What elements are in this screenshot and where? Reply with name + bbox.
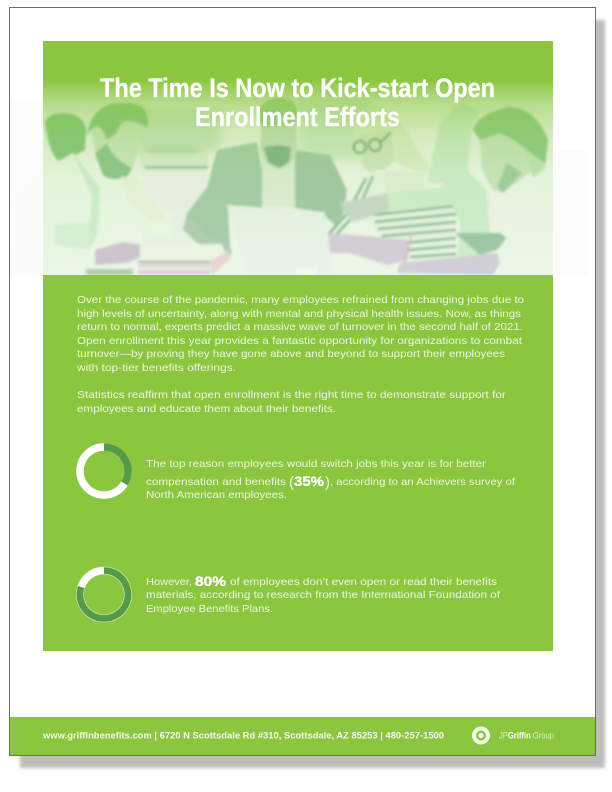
icon: company logo: JPGriffin Group (499, 730, 554, 740)
intro paragraph: turnover—by proving they have gone above and beyond to support their employees (77, 349, 505, 360)
center man (183, 142, 262, 248)
stat text: 80%: materials, according to research from the International Foundation of (146, 590, 500, 601)
stat text: 35%: , according to an Achievers survey of (330, 477, 515, 488)
intro paragraph: high levels of uncertainty, along with mental and physical health issues. Now, as things (77, 309, 521, 320)
chair (45, 113, 86, 163)
title: The Time Is Now to Kick-start Open (100, 73, 495, 103)
intro paragraph: Open enrollment this year provides a fantastic opportunity for organizations to combat (77, 336, 522, 347)
icon: company logo (474, 728, 554, 742)
stat text: 35%: 35% (294, 473, 325, 489)
green content panel (43, 41, 553, 651)
stat text: 80%: 80% (195, 573, 227, 589)
stat text: 80% (146, 573, 500, 615)
left man (58, 152, 76, 164)
footer contact line: www.griffinbenefits.com | 6720 N Scottsdale Rd #310, Scottsdale, AZ 85253 | 480-257-1500 (42, 730, 444, 742)
books, tablet and cup (138, 242, 226, 258)
standing person (427, 103, 490, 260)
stat text: 35%: compensation and benefits (146, 477, 286, 488)
stat text: 35%: ) (325, 474, 330, 491)
intro paragraph: Over the course of the pandemic, many employees refrained from changing jobs due to (77, 295, 524, 306)
intro paragraph (76, 295, 524, 374)
woman: striped shirt (350, 170, 457, 263)
stat text: 80%: Employee Benefits Plans. (146, 604, 273, 615)
second paragraph (77, 390, 507, 415)
footer band (10, 717, 595, 755)
stat text: 80%: of employees don’t even open or read their benefits (230, 577, 497, 588)
hero photo: team meeting around a laptop (43, 82, 553, 275)
stat text: 35%: The top reason employees would switch jobs this year is for better (146, 459, 487, 470)
laptop (226, 204, 327, 217)
right man (504, 238, 507, 240)
title (100, 73, 495, 132)
white wash outside the panel (12, 172, 43, 272)
back wall and desk (144, 152, 208, 166)
title: Enrollment Efforts (195, 102, 400, 132)
intro paragraph: return to normal, experts predict a massive wave of turnover in the second half of 2021. (77, 322, 523, 333)
donut chart: 80% (76, 567, 132, 622)
stat text: 35%: ( (289, 474, 294, 491)
second paragraph: employees and educate them about their benefits. (77, 404, 336, 415)
woman: hair (353, 105, 433, 175)
woman: arm and hand (387, 187, 452, 210)
intro paragraph: with top-tier benefits offerings. (76, 363, 236, 374)
stat text: 35% (146, 459, 515, 501)
stat text: 80%: However, (146, 577, 192, 588)
second paragraph: Statistics reaffirm that open enrollment is the right time to demonstrate support for (77, 390, 507, 401)
woman: glasses (354, 132, 391, 153)
stat text: 35%: North American employees. (146, 490, 287, 501)
donut chart: 35% (80, 447, 128, 495)
green overlay (43, 80, 553, 275)
